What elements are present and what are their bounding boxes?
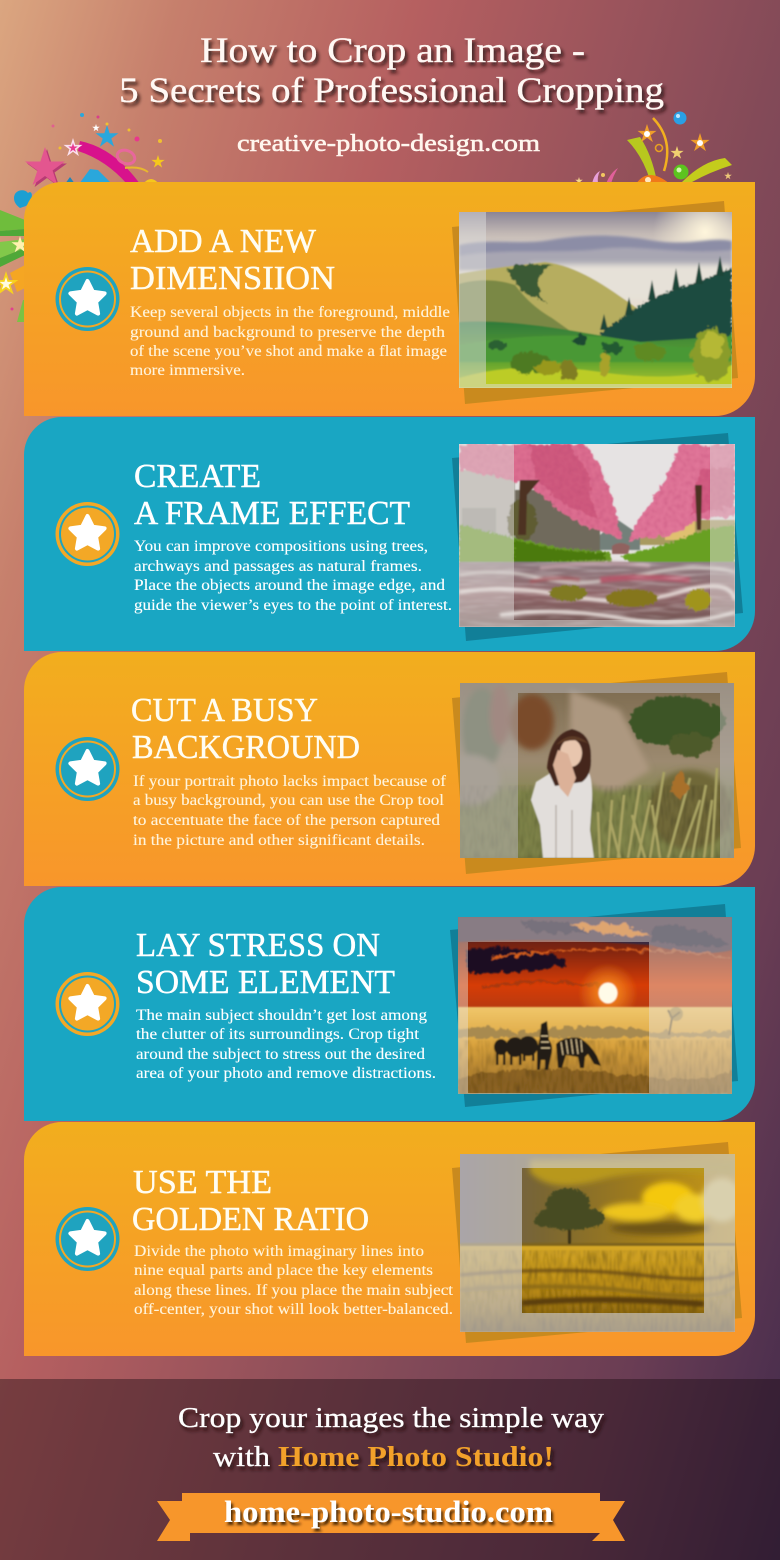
photo: lone tree in wheat field [460, 1154, 742, 1332]
body text: to accentuate the face of the person captured [133, 812, 440, 829]
photo: woman in meadow [440, 683, 734, 858]
panel: use the golden ratio [24, 1122, 755, 1356]
body text: If your portrait photo lacks impact because of [133, 773, 447, 790]
body text: nine equal parts and place the key elements [134, 1262, 433, 1279]
heading: ADD A NEW [130, 223, 317, 260]
photo shadow [452, 1142, 742, 1343]
heading: SOME ELEMENT [136, 964, 395, 1001]
heading [136, 927, 395, 1001]
body text: You can improve compositions using trees, [134, 538, 428, 555]
photo shadow [452, 201, 738, 404]
body text: archways and passages as natural frames. [134, 558, 422, 575]
footer band [0, 1379, 780, 1560]
star badge 5 [56, 1207, 120, 1271]
star badge 1 [56, 267, 120, 331]
body text: ground and background to preserve the depth [130, 324, 445, 341]
footer call to action: Crop your images the simple way [178, 1402, 605, 1434]
body text [134, 538, 452, 614]
photo shadow [452, 433, 743, 641]
body text [133, 773, 447, 849]
heading: CUT A BUSY [131, 692, 318, 729]
heading: A FRAME EFFECT [134, 495, 410, 532]
body text [134, 1243, 454, 1318]
panel: lay stress on some element [24, 887, 755, 1121]
body text: Divide the photo with imaginary lines into [134, 1243, 424, 1260]
crop overlay [460, 1154, 735, 1332]
footer call to action: with [213, 1441, 271, 1473]
card background orange [24, 652, 755, 886]
body text: around the subject to stress out the desired [136, 1046, 425, 1063]
heading: USE THE [133, 1164, 272, 1201]
heading: BACKGROUND [132, 729, 360, 766]
crop overlay [458, 917, 732, 1094]
card background orange [24, 1122, 755, 1356]
photo shadow [452, 672, 741, 874]
body text: in the picture and other significant details. [133, 832, 425, 849]
panel: cut a busy background [24, 652, 755, 886]
body text [130, 304, 450, 379]
body text: more immersive. [130, 362, 245, 379]
body text: area of your photo and remove distractions. [136, 1065, 436, 1082]
heading [131, 692, 360, 766]
website url: home-photo-studio.com [224, 1494, 553, 1529]
footer call to action: Home Photo Studio! [278, 1441, 554, 1473]
photo: mountain valley [459, 212, 732, 388]
panel: add a new dimension [24, 180, 757, 416]
crop overlay [459, 212, 732, 388]
website subtitle: creative-photo-design.com [237, 131, 540, 157]
star badge 4 [56, 972, 120, 1036]
heading: GOLDEN RATIO [132, 1201, 369, 1238]
body text: guide the viewer’s eyes to the point of interest. [134, 597, 452, 614]
card background orange [24, 182, 755, 416]
body text: off-center, your shot will look better-balanced. [134, 1301, 453, 1318]
title [119, 30, 664, 110]
heading [132, 1164, 369, 1238]
panel: create a frame effect [24, 417, 755, 651]
heading [134, 458, 410, 532]
title: 5 Secrets of Professional Cropping [119, 70, 664, 110]
heading: LAY STRESS ON [136, 927, 380, 964]
body text: of the scene you’ve shot and make a flat image [130, 343, 447, 360]
body text: a busy background, you can use the Crop tool [133, 792, 445, 809]
body text: Place the objects around the image edge, and [134, 577, 445, 594]
ribbon banner [157, 1493, 625, 1541]
footer call to action [178, 1402, 605, 1473]
crop overlay [459, 444, 735, 627]
heading: DIMENSIION [130, 260, 335, 297]
card background teal [24, 887, 755, 1121]
heading: CREATE [134, 458, 261, 495]
body text: The main subject shouldn’t get lost among [136, 1007, 427, 1024]
decoration: right confetti burst [575, 112, 732, 184]
title: How to Crop an Image - [200, 30, 585, 70]
body text: along these lines. If you place the main subject [134, 1282, 454, 1299]
star badge 3 [56, 737, 120, 801]
photo shadow [450, 904, 738, 1107]
star badge 2 [56, 502, 120, 566]
card background teal [24, 417, 755, 651]
decoration: left confetti burst [0, 113, 165, 322]
heading [130, 223, 335, 297]
photo: cherry blossom river [459, 444, 735, 627]
body text: Keep several objects in the foreground, middle [130, 304, 450, 321]
photo: zebras at sunset [458, 917, 732, 1094]
body text [136, 1007, 436, 1082]
crop overlay [460, 683, 734, 858]
body text: the clutter of its surroundings. Crop tight [136, 1026, 420, 1043]
